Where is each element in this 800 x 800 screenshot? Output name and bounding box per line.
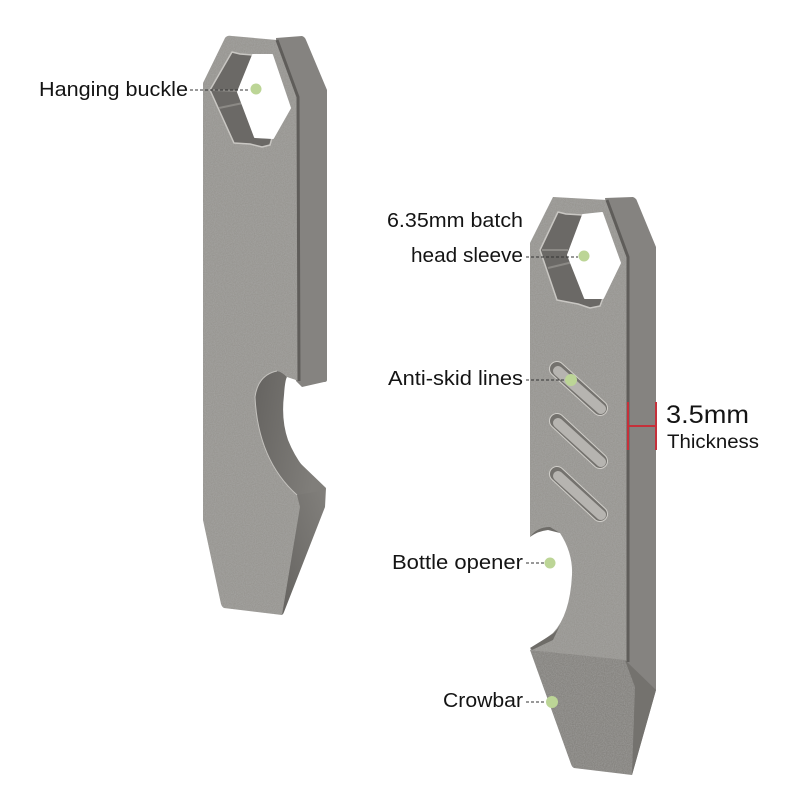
right tool hex socket wall [540,212,603,308]
right tool front face [530,197,628,662]
label: crowbar: Crowbar [443,690,523,712]
left tool hex hole [238,55,290,138]
thickness label [666,401,759,453]
label: batch head sleeve [387,210,590,267]
right tool bevel highlight [607,200,628,662]
left tool side edge [276,36,327,387]
thickness label: Thickness [667,432,759,453]
tool: back view with hanging buckle and bottle notch [203,36,327,615]
label: batch head sleeve: 6.35mm batch [387,210,523,232]
anti-skid slots [557,369,601,515]
tool: front view with anti-skid lines [530,197,656,775]
left tool hex socket wall [210,52,272,147]
label: batch head sleeve: head sleeve [411,245,523,267]
right tool socket ridge [542,250,573,268]
left tool front face [203,36,300,615]
label: anti-skid lines: Anti-skid lines [388,368,523,390]
label: hanging buckle [39,79,262,101]
left tool socket ridge [212,90,243,108]
left tool notch wall [255,371,326,495]
label: anti-skid lines [388,368,577,390]
right tool lower side facet [625,660,656,775]
right tool notch upper rim [530,527,560,537]
left tool notch rim [255,371,297,495]
left tool tip side [272,463,326,615]
label: bottle opener: Bottle opener [392,552,523,574]
label: hanging buckle: Hanging buckle [39,79,188,101]
right tool crowbar facet [530,650,635,775]
right tool side edge [605,197,656,775]
right tool notch lower rim [530,625,560,650]
label: crowbar [443,690,558,712]
thickness dimension marker [628,402,656,450]
thickness label: 3.5mm [666,401,749,429]
left tool bevel highlight [277,40,299,381]
right tool hex hole [568,213,620,298]
